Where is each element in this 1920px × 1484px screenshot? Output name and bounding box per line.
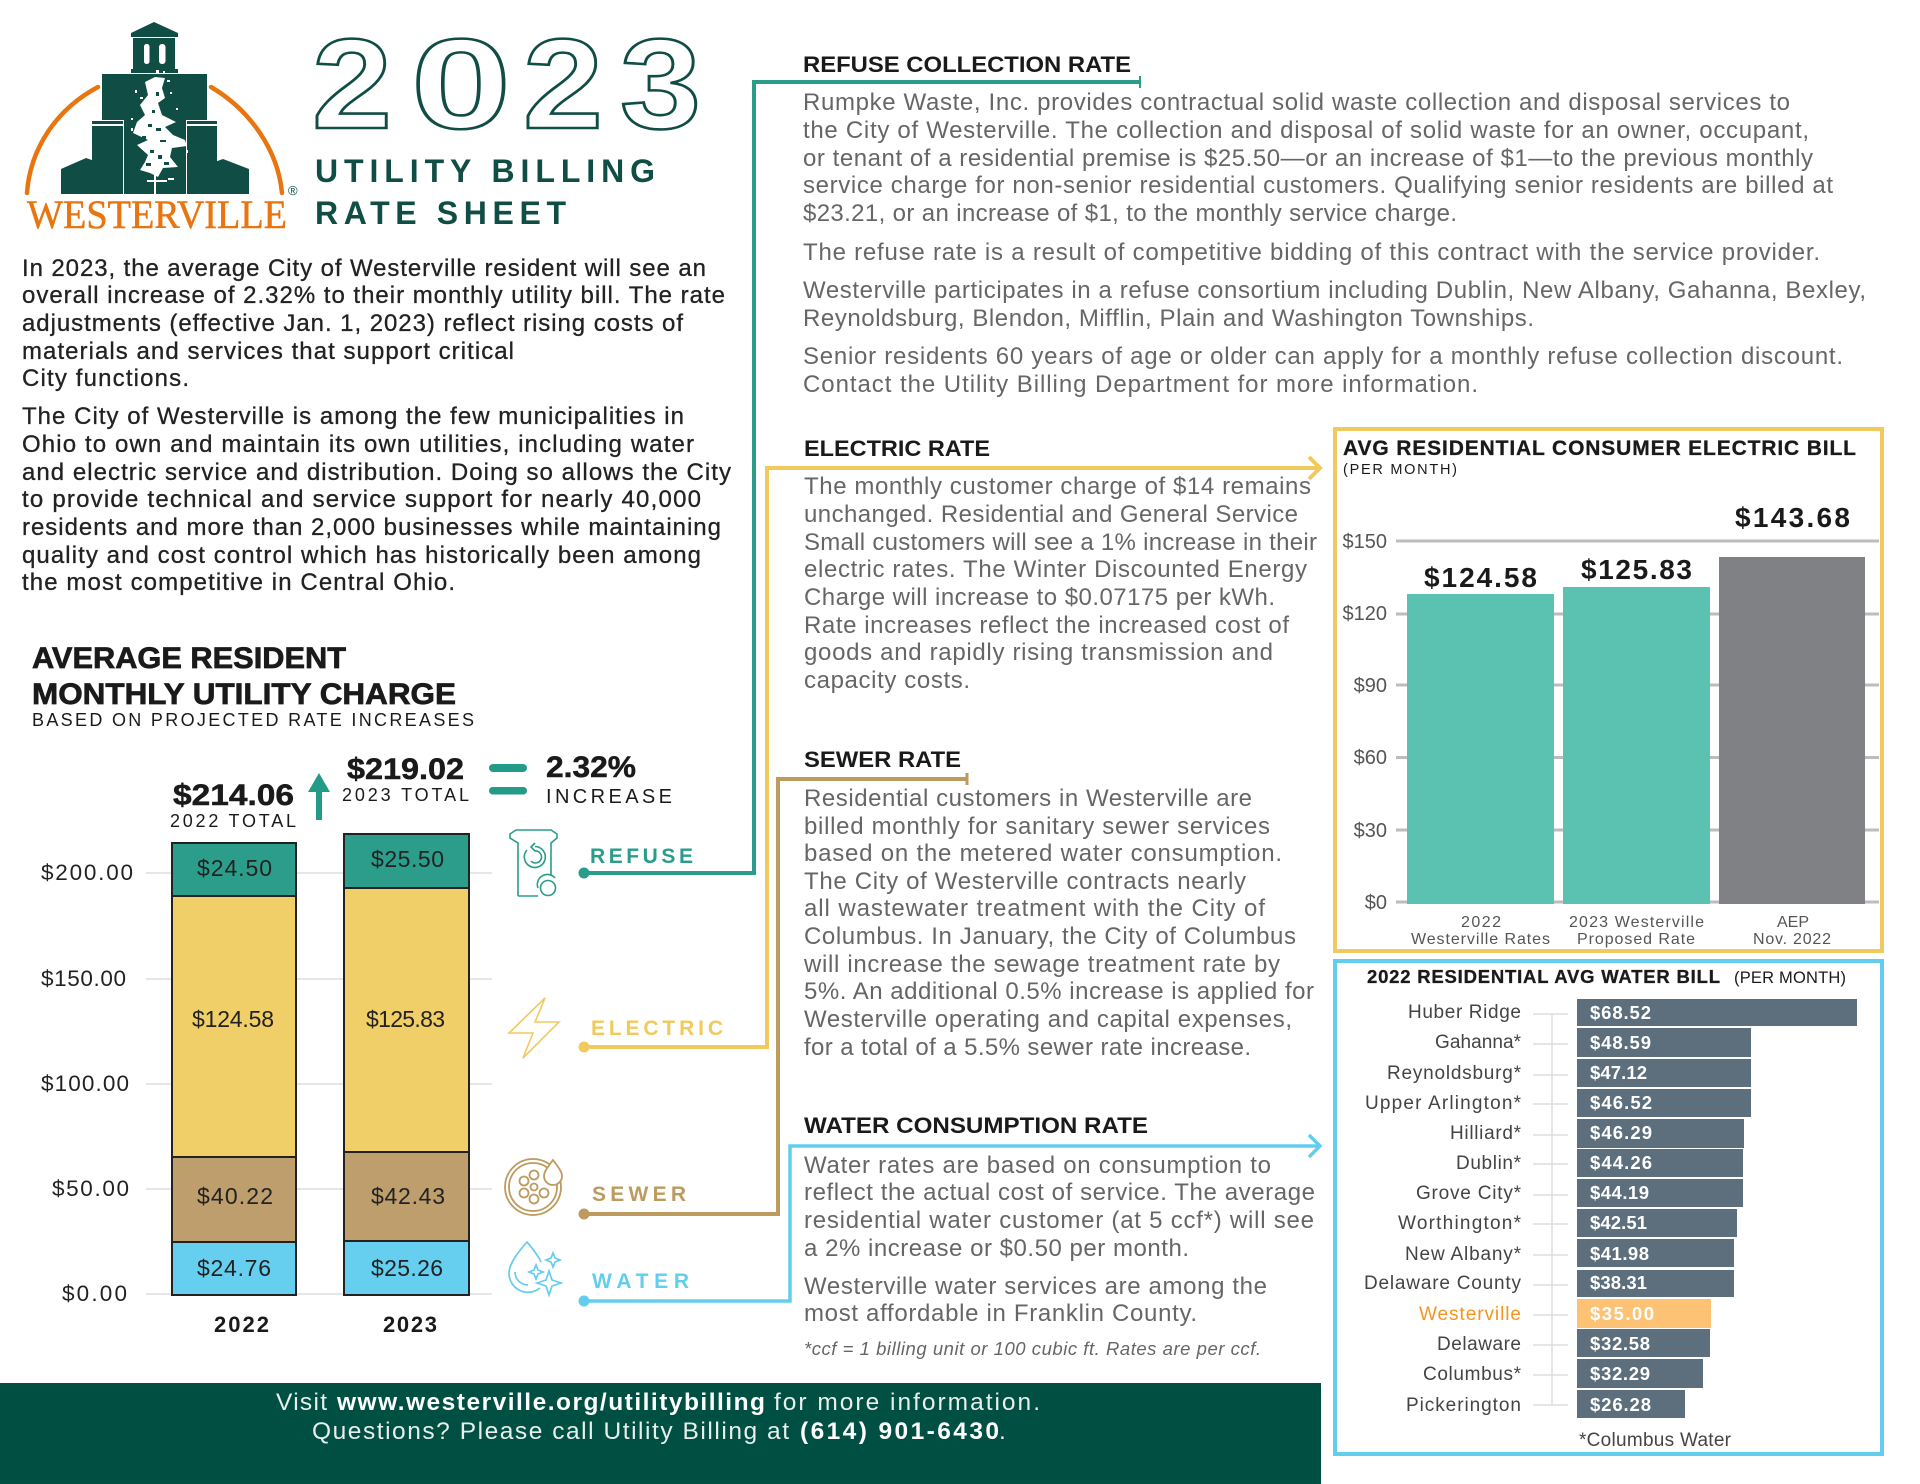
stacked bar: 2023 [344, 834, 469, 1295]
footer banner: . [999, 1418, 1006, 1445]
text block: water body: Water rates are based on consumption to [804, 1152, 1271, 1179]
text block: electric body: Charge will increase to $0.07175 per kWh. [804, 584, 1275, 611]
bar value labels: $124.58 [192, 1006, 274, 1032]
city labels: Dublin* [1456, 1153, 1522, 1174]
text block: intro paragraph 1: City functions. [22, 365, 189, 392]
bar values: $68.52 [1590, 1002, 1651, 1023]
text block: sewer body: Westerville operating and capital expenses, [804, 1006, 1292, 1033]
heading: water: WATER CONSUMPTION RATE [804, 1113, 1148, 1138]
panel: electric bill chart [1335, 429, 1882, 951]
text block: refuse body: Contact the Utility Billing Department for more information. [803, 371, 1478, 398]
bar values [1424, 502, 1850, 593]
axis labels: $50.00 [52, 1176, 129, 1201]
text block: sewer body: will increase the sewage treatment rate by [803, 951, 1280, 978]
heading: average resident monthly utility charge: MONTHLY UTILITY CHARGE [32, 678, 456, 711]
text block: intro paragraph 2: Ohio to own and maintain its own utilities, including water [22, 431, 694, 458]
bar categories: 2022 [1461, 914, 1501, 931]
year labels: 2023 [383, 1312, 437, 1337]
text block: water body: residential water customer (at 5 ccf*) will see [804, 1207, 1314, 1234]
bar value labels: $40.22 [197, 1183, 273, 1209]
text block: sewer body: all wastewater treatment with the City of [804, 895, 1265, 922]
panel: sewer rate [803, 747, 1314, 1061]
axis labels [1342, 531, 1387, 914]
text block: refuse body: the City of Westerville. The collection and disposal of solid waste for an owner, occupant, [803, 117, 1809, 144]
heading: utility billing rate sheet: RATE SHEET [315, 195, 566, 231]
city labels: Worthington* [1398, 1213, 1522, 1234]
bar categories: Nov. 2022 [1753, 931, 1831, 948]
text block: refuse body: Reynoldsburg, Blendon, Mifflin, Plain and Washington Townships. [803, 305, 1534, 332]
text block: sewer body [803, 785, 1314, 1061]
bar value labels: $24.50 [197, 855, 272, 881]
footer banner: Visit [276, 1389, 327, 1416]
connector: sewer line [578, 773, 967, 1220]
title: 2023 [312, 13, 701, 156]
panel: refuse collection rate [803, 52, 1866, 398]
text block: refuse body [803, 89, 1866, 398]
label: electric: ELECTRIC [591, 1017, 723, 1040]
text block: intro paragraph 2 [22, 403, 731, 596]
text block: refuse body: Rumpke Waste, Inc. provides contractual solid waste collection and disposal services to [803, 89, 1790, 116]
text block: intro paragraph 2: the most competitive in Central Ohio. [22, 569, 455, 596]
text block: refuse body: Westerville participates in a refuse consortium including Dublin, New Albany, Gahanna, Bexley, [803, 277, 1866, 304]
bar chart: monthly utility charge [41, 834, 492, 1337]
text block: electric body: Small customers will see a 1% increase in their [804, 529, 1317, 556]
panel: water consumption rate [804, 1113, 1315, 1359]
bar values: $42.51 [1590, 1212, 1647, 1233]
text block: intro paragraph 1 [22, 255, 725, 392]
text block: sewer body: Residential customers in Westerville are [804, 785, 1252, 812]
text block: intro paragraph 2: residents and more than 2,000 businesses while maintaining [22, 514, 721, 541]
text block: sewer body: billed monthly for sanitary sewer services [804, 813, 1270, 840]
connector: refuse line [578, 76, 1140, 878]
city labels: Delaware County [1364, 1273, 1522, 1294]
text block: water body: reflect the actual cost of service. The average [804, 1179, 1315, 1206]
bar values: $124.58 [1424, 562, 1537, 593]
text block: intro paragraph 1: adjustments (effective Jan. 1, 2023) reflect rising costs of [22, 310, 683, 337]
text block: sewer body: Columbus. In January, the City of Columbus [804, 923, 1296, 950]
heading: utility billing rate sheet [315, 153, 655, 231]
text block: refuse body: service charge for non-senior residential customers. Qualifying senior residents are billed at [803, 172, 1833, 199]
text block: intro paragraph 1: In 2023, the average City of Westerville resident will see an [22, 255, 706, 282]
year labels: 2022 [214, 1312, 269, 1337]
icon: water drop with sparkles [509, 1242, 561, 1295]
text block: intro paragraph 1: overall increase of 2.32% to their monthly utility bill. The rate [22, 282, 725, 309]
icon: Westerville logo [27, 22, 298, 237]
bar categories: 2023 Westerville [1569, 914, 1704, 931]
callout: totals and percent increase: 2.32% [546, 751, 636, 784]
axis labels: $120 [1342, 603, 1387, 625]
heading: utility billing rate sheet: UTILITY BILLING [315, 153, 655, 189]
text block: water body [804, 1152, 1315, 1327]
text block: water body: Westerville water services are among the [804, 1273, 1267, 1300]
text block: electric body: The monthly customer charge of $14 remains [804, 473, 1311, 500]
city labels: Huber Ridge [1408, 1002, 1521, 1023]
bar values [1590, 1002, 1654, 1415]
axis labels: $150 [1342, 531, 1387, 553]
text block: sewer body: based on the metered water consumption. [804, 840, 1282, 867]
bar categories: Proposed Rate [1577, 931, 1695, 948]
text block: electric body: capacity costs. [804, 667, 970, 694]
heading: refuse: REFUSE COLLECTION RATE [803, 52, 1131, 77]
title: 2023: 3 [620, 13, 701, 156]
text block: electric body: electric rates. The Winter Discounted Energy [804, 556, 1307, 583]
city labels: Reynoldsburg* [1387, 1063, 1522, 1084]
footer banner [0, 1383, 1321, 1484]
text block: intro paragraph 2: to provide technical and service support for nearly 40,000 [22, 486, 701, 513]
callout: totals and percent increase [170, 751, 672, 831]
text block: electric body [804, 473, 1317, 694]
chart title: (PER MONTH) [1734, 969, 1846, 987]
axis labels: $100.00 [41, 1071, 129, 1096]
label: refuse: REFUSE [590, 845, 693, 868]
text block: intro paragraph 2: The City of Westerville is among the few municipalities in [22, 403, 684, 430]
footer banner: Questions? Please call Utility Billing at [312, 1418, 789, 1445]
bar values: $35.00 [1590, 1303, 1654, 1324]
bar values: $26.28 [1590, 1394, 1651, 1415]
bar categories: Westerville Rates [1411, 931, 1550, 948]
axis labels: $150.00 [41, 966, 126, 991]
axis labels: $60 [1354, 747, 1387, 769]
icon: refuse bin [510, 830, 557, 896]
callout: totals and percent increase: INCREASE [546, 786, 672, 808]
bar values: $143.68 [1735, 502, 1850, 533]
footnote: *Columbus Water [1579, 1430, 1732, 1451]
bar value labels: $24.76 [197, 1255, 271, 1281]
text block: sewer body: for a total of a 5.5% sewer rate increase. [804, 1034, 1251, 1061]
heading: electric: ELECTRIC RATE [804, 436, 990, 461]
text block: sewer body: The City of Westerville contracts nearly [804, 868, 1246, 895]
city labels: Grove City* [1416, 1183, 1522, 1204]
icon: Westerville logo: WESTERVILLE [27, 192, 287, 237]
text block: refuse body: Senior residents 60 years of age or older can apply for a monthly refuse collection discount. [803, 343, 1843, 370]
axis labels [41, 860, 133, 1306]
bar value labels [192, 846, 445, 1281]
panel: electric rate [804, 436, 1317, 694]
label: water: WATER [592, 1270, 689, 1293]
city labels: Westerville [1419, 1304, 1521, 1325]
city labels: Hilliard* [1450, 1123, 1522, 1144]
axis labels: $90 [1354, 675, 1387, 697]
footer banner: www.westerville.org/utilitybilling [336, 1389, 765, 1416]
bar values: $32.29 [1590, 1363, 1650, 1384]
chart title: 2022 RESIDENTIAL AVG WATER BILL [1367, 966, 1720, 987]
connector: water line with arrow [578, 1135, 1320, 1306]
text block: sewer body: 5%. An additional 0.5% increase is applied for [804, 978, 1314, 1005]
bar values: $125.83 [1581, 554, 1692, 585]
bar values: $32.58 [1590, 1333, 1650, 1354]
callout: totals and percent increase: $219.02 [347, 753, 464, 786]
bar values: $44.26 [1590, 1152, 1652, 1173]
heading: sewer: SEWER RATE [804, 747, 961, 772]
chart title [1343, 437, 1856, 478]
footnote: *ccf = 1 billing unit or 100 cubic ft. Rates are per ccf. [804, 1338, 1261, 1359]
bar values: $38.31 [1590, 1272, 1647, 1293]
bar categories: AEP [1777, 914, 1809, 931]
bar values: $48.59 [1590, 1032, 1651, 1053]
bar categories [1411, 914, 1831, 948]
bar value labels: $125.83 [366, 1006, 445, 1032]
text block: refuse body: $23.21, or an increase of $1, to the monthly service charge. [803, 200, 1457, 227]
bar value labels: $42.43 [371, 1183, 445, 1209]
bar value labels: $25.50 [371, 846, 444, 872]
icon: Westerville logo: ® [288, 183, 298, 198]
icon: sewer grate [505, 1159, 562, 1215]
bar values: $47.12 [1590, 1062, 1647, 1083]
footer banner: (614) 901-6430 [800, 1418, 999, 1445]
axis labels: $30 [1354, 820, 1387, 842]
panel: water bill chart [1335, 961, 1882, 1454]
horizontal bars [1577, 999, 1857, 1418]
city labels: Gahanna* [1435, 1032, 1522, 1053]
text block: intro paragraph 1: materials and services that support critical [22, 338, 514, 365]
city labels: New Albany* [1405, 1244, 1522, 1265]
bar values: $41.98 [1590, 1243, 1649, 1264]
text block: intro paragraph 2: quality and cost control which has historically been among [22, 542, 701, 569]
callout: totals and percent increase: 2023 TOTAL [342, 785, 469, 805]
bar values: $44.19 [1590, 1182, 1649, 1203]
year labels [214, 1312, 437, 1337]
city labels: Delaware [1437, 1334, 1521, 1355]
callout: totals and percent increase: 2022 TOTAL [170, 811, 296, 831]
heading: average resident monthly utility charge: BASED ON PROJECTED RATE INCREASES [32, 710, 474, 730]
city labels: Pickerington [1406, 1395, 1521, 1416]
city labels: Upper Arlington* [1365, 1093, 1522, 1114]
callout: totals and percent increase: $214.06 [173, 779, 294, 812]
bars [1407, 557, 1865, 904]
label: sewer: SEWER [592, 1183, 686, 1206]
text block: intro paragraph 2: and electric service and distribution. Doing so allows the City [22, 459, 731, 486]
text block: electric body: Rate increases reflect the increased cost of [804, 612, 1289, 639]
bar values: $46.29 [1590, 1122, 1652, 1143]
chart title: (PER MONTH) [1343, 462, 1457, 478]
text block: water body: most affordable in Franklin County. [804, 1300, 1197, 1327]
footer banner: for more information. [774, 1389, 1040, 1416]
text block: electric body: goods and rapidly rising transmission and [804, 639, 1273, 666]
title: 2023: 2 [523, 13, 603, 156]
bar values: $46.52 [1590, 1092, 1652, 1113]
text block: refuse body: or tenant of a residential premise is $25.50—or an increase of $1—to the previous monthly [803, 145, 1813, 172]
title: 2023: 0 [411, 13, 511, 156]
text block: electric body: unchanged. Residential and General Service [804, 501, 1298, 528]
title: 2023: 2 [312, 13, 392, 156]
stacked bar: 2022 [172, 843, 296, 1295]
text block: refuse body: The refuse rate is a result of competitive bidding of this contract with the service provider. [803, 239, 1820, 266]
city labels [1364, 1002, 1522, 1416]
heading: average resident monthly utility charge [32, 642, 474, 730]
icon: lightning bolt [509, 998, 559, 1058]
connector: electric line with arrow [578, 457, 1320, 1052]
bar value labels: $25.26 [371, 1255, 443, 1281]
axis labels: $200.00 [41, 860, 133, 885]
heading: average resident monthly utility charge: AVERAGE RESIDENT [32, 642, 346, 675]
chart title: AVG RESIDENTIAL CONSUMER ELECTRIC BILL [1343, 437, 1856, 460]
city labels: Columbus* [1423, 1364, 1522, 1385]
axis labels: $0.00 [62, 1281, 127, 1306]
text block: water body: a 2% increase or $0.50 per month. [804, 1235, 1189, 1262]
axis labels: $0 [1365, 892, 1387, 914]
